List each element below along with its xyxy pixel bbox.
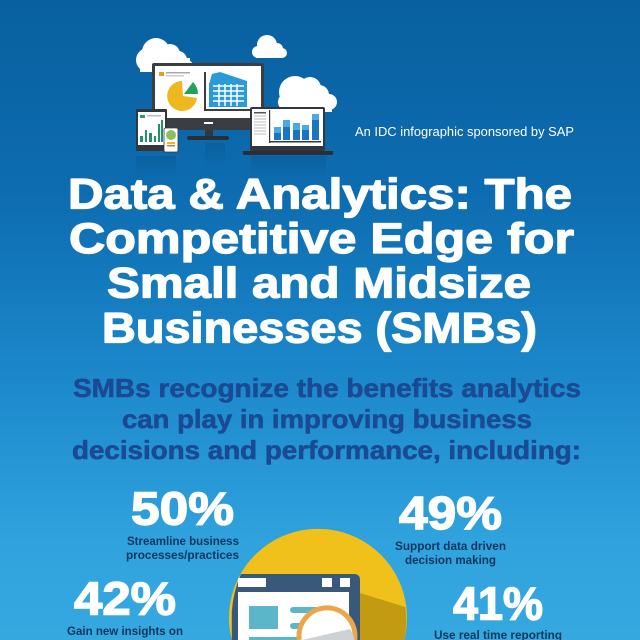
magnifying glass (299, 608, 355, 640)
sponsor note: An IDC infographic sponsored by SAP (355, 125, 574, 139)
stat: 50% (126, 482, 239, 562)
icon: office building (209, 72, 247, 107)
stat: 42%: Gain new insights on (67, 626, 183, 638)
stat: 50%: processes/practices (126, 550, 239, 562)
device reflection (136, 143, 326, 178)
icon: phone (164, 128, 178, 152)
subheading: can play in improving business (122, 404, 532, 434)
centre graphic: pie and browser (229, 529, 407, 640)
subheading: SMBs recognize the benefits analytics (73, 373, 581, 403)
title: Small and Midsize (107, 260, 531, 308)
icon: cloud left (136, 38, 193, 72)
title: Data & Analytics: The (68, 170, 572, 218)
stat: 50%: Streamline business (127, 536, 239, 548)
icon: laptop with bar chart (243, 107, 333, 155)
title: Businesses (SMBs) (102, 304, 537, 352)
stat: 42%: 42% (74, 572, 176, 624)
pie chart (167, 81, 198, 111)
stat: 49%: 49% (399, 487, 502, 539)
icon: desktop monitor (152, 63, 264, 140)
subheading (72, 373, 581, 465)
stat: 49%: Support data driven (395, 541, 506, 553)
stat: 41%: 41% (453, 578, 543, 630)
subheading: decisions and performance, including: (72, 435, 581, 465)
stat: 42% (67, 572, 183, 638)
stat: 49% (395, 487, 506, 567)
browser window (232, 574, 360, 640)
icon: cloud right (278, 76, 337, 112)
title: Competitive Edge for (69, 215, 574, 263)
icon: tablet (136, 109, 167, 151)
icon: cloud top right (252, 35, 287, 58)
title (68, 170, 574, 352)
stat: 49%: decision making (405, 555, 496, 567)
stat: 50%: 50% (131, 482, 234, 534)
stat: 41% (434, 578, 562, 640)
pie dark wedge (360, 593, 406, 640)
illustration: devices and clouds (136, 35, 337, 178)
pie background (229, 529, 407, 640)
